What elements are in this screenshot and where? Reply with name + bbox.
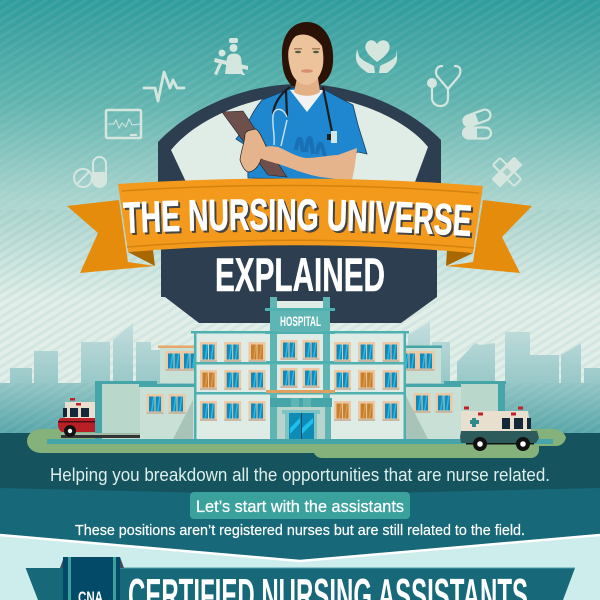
right lower wing	[405, 381, 506, 439]
teal walkway	[47, 439, 553, 444]
left fold	[128, 250, 155, 266]
icon: pulse line	[144, 72, 184, 101]
subtitle: explained: EXPLAINED	[215, 248, 385, 301]
right fold	[446, 250, 473, 266]
left upper wing	[158, 346, 198, 383]
scrubs	[236, 88, 367, 180]
right upper wing	[400, 346, 442, 383]
clipboard	[222, 111, 287, 177]
icon: heart monitor	[106, 110, 141, 138]
right ambulance	[460, 406, 539, 451]
right tail	[446, 200, 532, 273]
lower section background	[0, 535, 600, 600]
icon: pill and capsule left	[74, 157, 106, 188]
main block	[191, 331, 409, 439]
scrub folds	[296, 138, 325, 156]
city skyline	[0, 322, 600, 435]
banner shape	[26, 568, 575, 600]
icon: stethoscope	[427, 66, 460, 106]
stethoscope light tube	[273, 109, 287, 146]
banner top edge	[120, 568, 575, 569]
right arm and hand	[253, 146, 357, 180]
entrance	[270, 398, 332, 439]
badge folds	[60, 557, 64, 568]
face	[288, 34, 323, 85]
windows	[146, 340, 452, 421]
title: THE NURSING UNIVERSE	[122, 198, 472, 236]
ground band	[0, 433, 600, 561]
left lower wing	[95, 381, 195, 439]
icon: heart in hands	[356, 40, 397, 73]
hospital building	[95, 297, 506, 439]
icon: bandage	[485, 150, 529, 194]
orange ribbon banner	[67, 178, 532, 273]
callout: start with the assistants: Let’s start with the assistants	[196, 497, 404, 516]
neck	[294, 78, 320, 96]
shield backdrop	[158, 84, 441, 323]
road under left ambulance	[61, 433, 140, 438]
hospital sign	[277, 311, 323, 332]
icon: nurse and patient	[214, 38, 248, 75]
hair	[282, 22, 333, 86]
ribbon main	[118, 178, 483, 253]
left arm and hand	[240, 129, 266, 172]
callout: start with the assistants	[190, 492, 410, 519]
tagline: Helping you breakdown all the opportunities that are nurse related.	[50, 465, 550, 485]
grass	[27, 429, 566, 458]
CNA badge	[63, 557, 120, 600]
explanatory note: These positions aren’t registered nurses but are still related to the field.	[75, 522, 525, 539]
section banner: certified nursing assistants	[26, 557, 575, 600]
title	[122, 198, 474, 238]
background sky	[0, 0, 600, 400]
left tail	[67, 200, 155, 273]
shield inner panel	[171, 95, 428, 182]
hospital sign: HOSPITAL	[280, 313, 321, 329]
ribbon stitching	[122, 185, 479, 248]
left ambulance	[58, 398, 95, 437]
icon: capsules right	[461, 108, 492, 139]
stethoscope head	[327, 131, 337, 143]
lips	[301, 69, 313, 73]
tower	[265, 297, 335, 408]
undershirt	[290, 90, 324, 112]
nurse illustration	[222, 22, 367, 180]
eyes	[294, 48, 320, 53]
title: THE NURSING UNIVERSE	[124, 201, 474, 238]
stethoscope tubes	[273, 87, 332, 132]
